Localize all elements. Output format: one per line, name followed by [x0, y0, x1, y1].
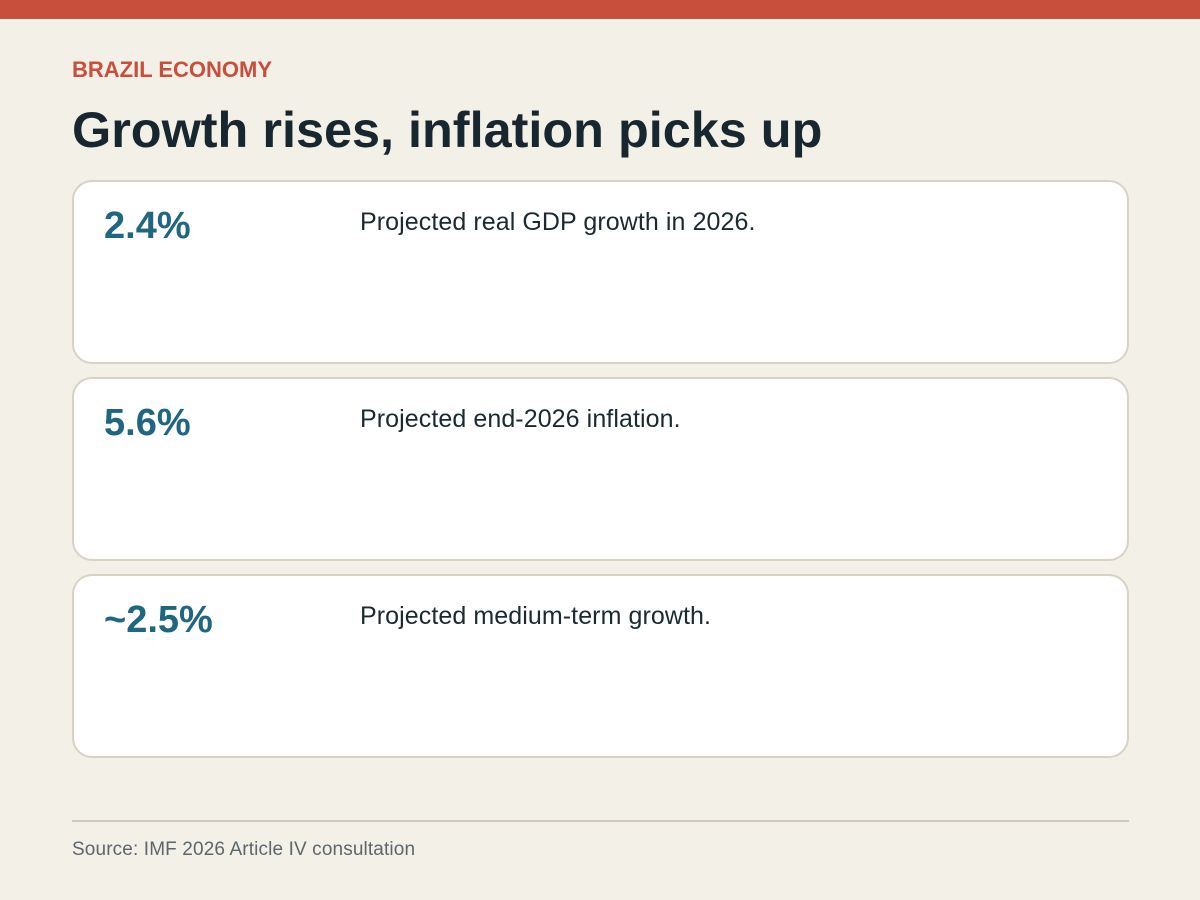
description: inflation: Projected end-2026 inflation.	[360, 405, 681, 433]
panel: inflation	[72, 377, 1129, 561]
panel: medium-term growth	[72, 574, 1129, 758]
eyebrow label: BRAZIL ECONOMY	[72, 57, 272, 82]
stat: 2.4%: 2.4%	[104, 205, 191, 247]
stat: ~2.5%: ~2.5%	[104, 599, 213, 641]
top accent bar	[0, 0, 1200, 19]
panel: GDP growth	[72, 180, 1129, 364]
description: GDP growth: Projected real GDP growth in 2026.	[360, 208, 756, 236]
description: medium-term growth: Projected medium-term growth.	[360, 602, 711, 630]
source note: Source: IMF 2026 Article IV consultation	[72, 839, 415, 860]
title: Growth rises, inflation picks up	[72, 101, 822, 158]
stat: 5.6%: 5.6%	[104, 402, 191, 444]
